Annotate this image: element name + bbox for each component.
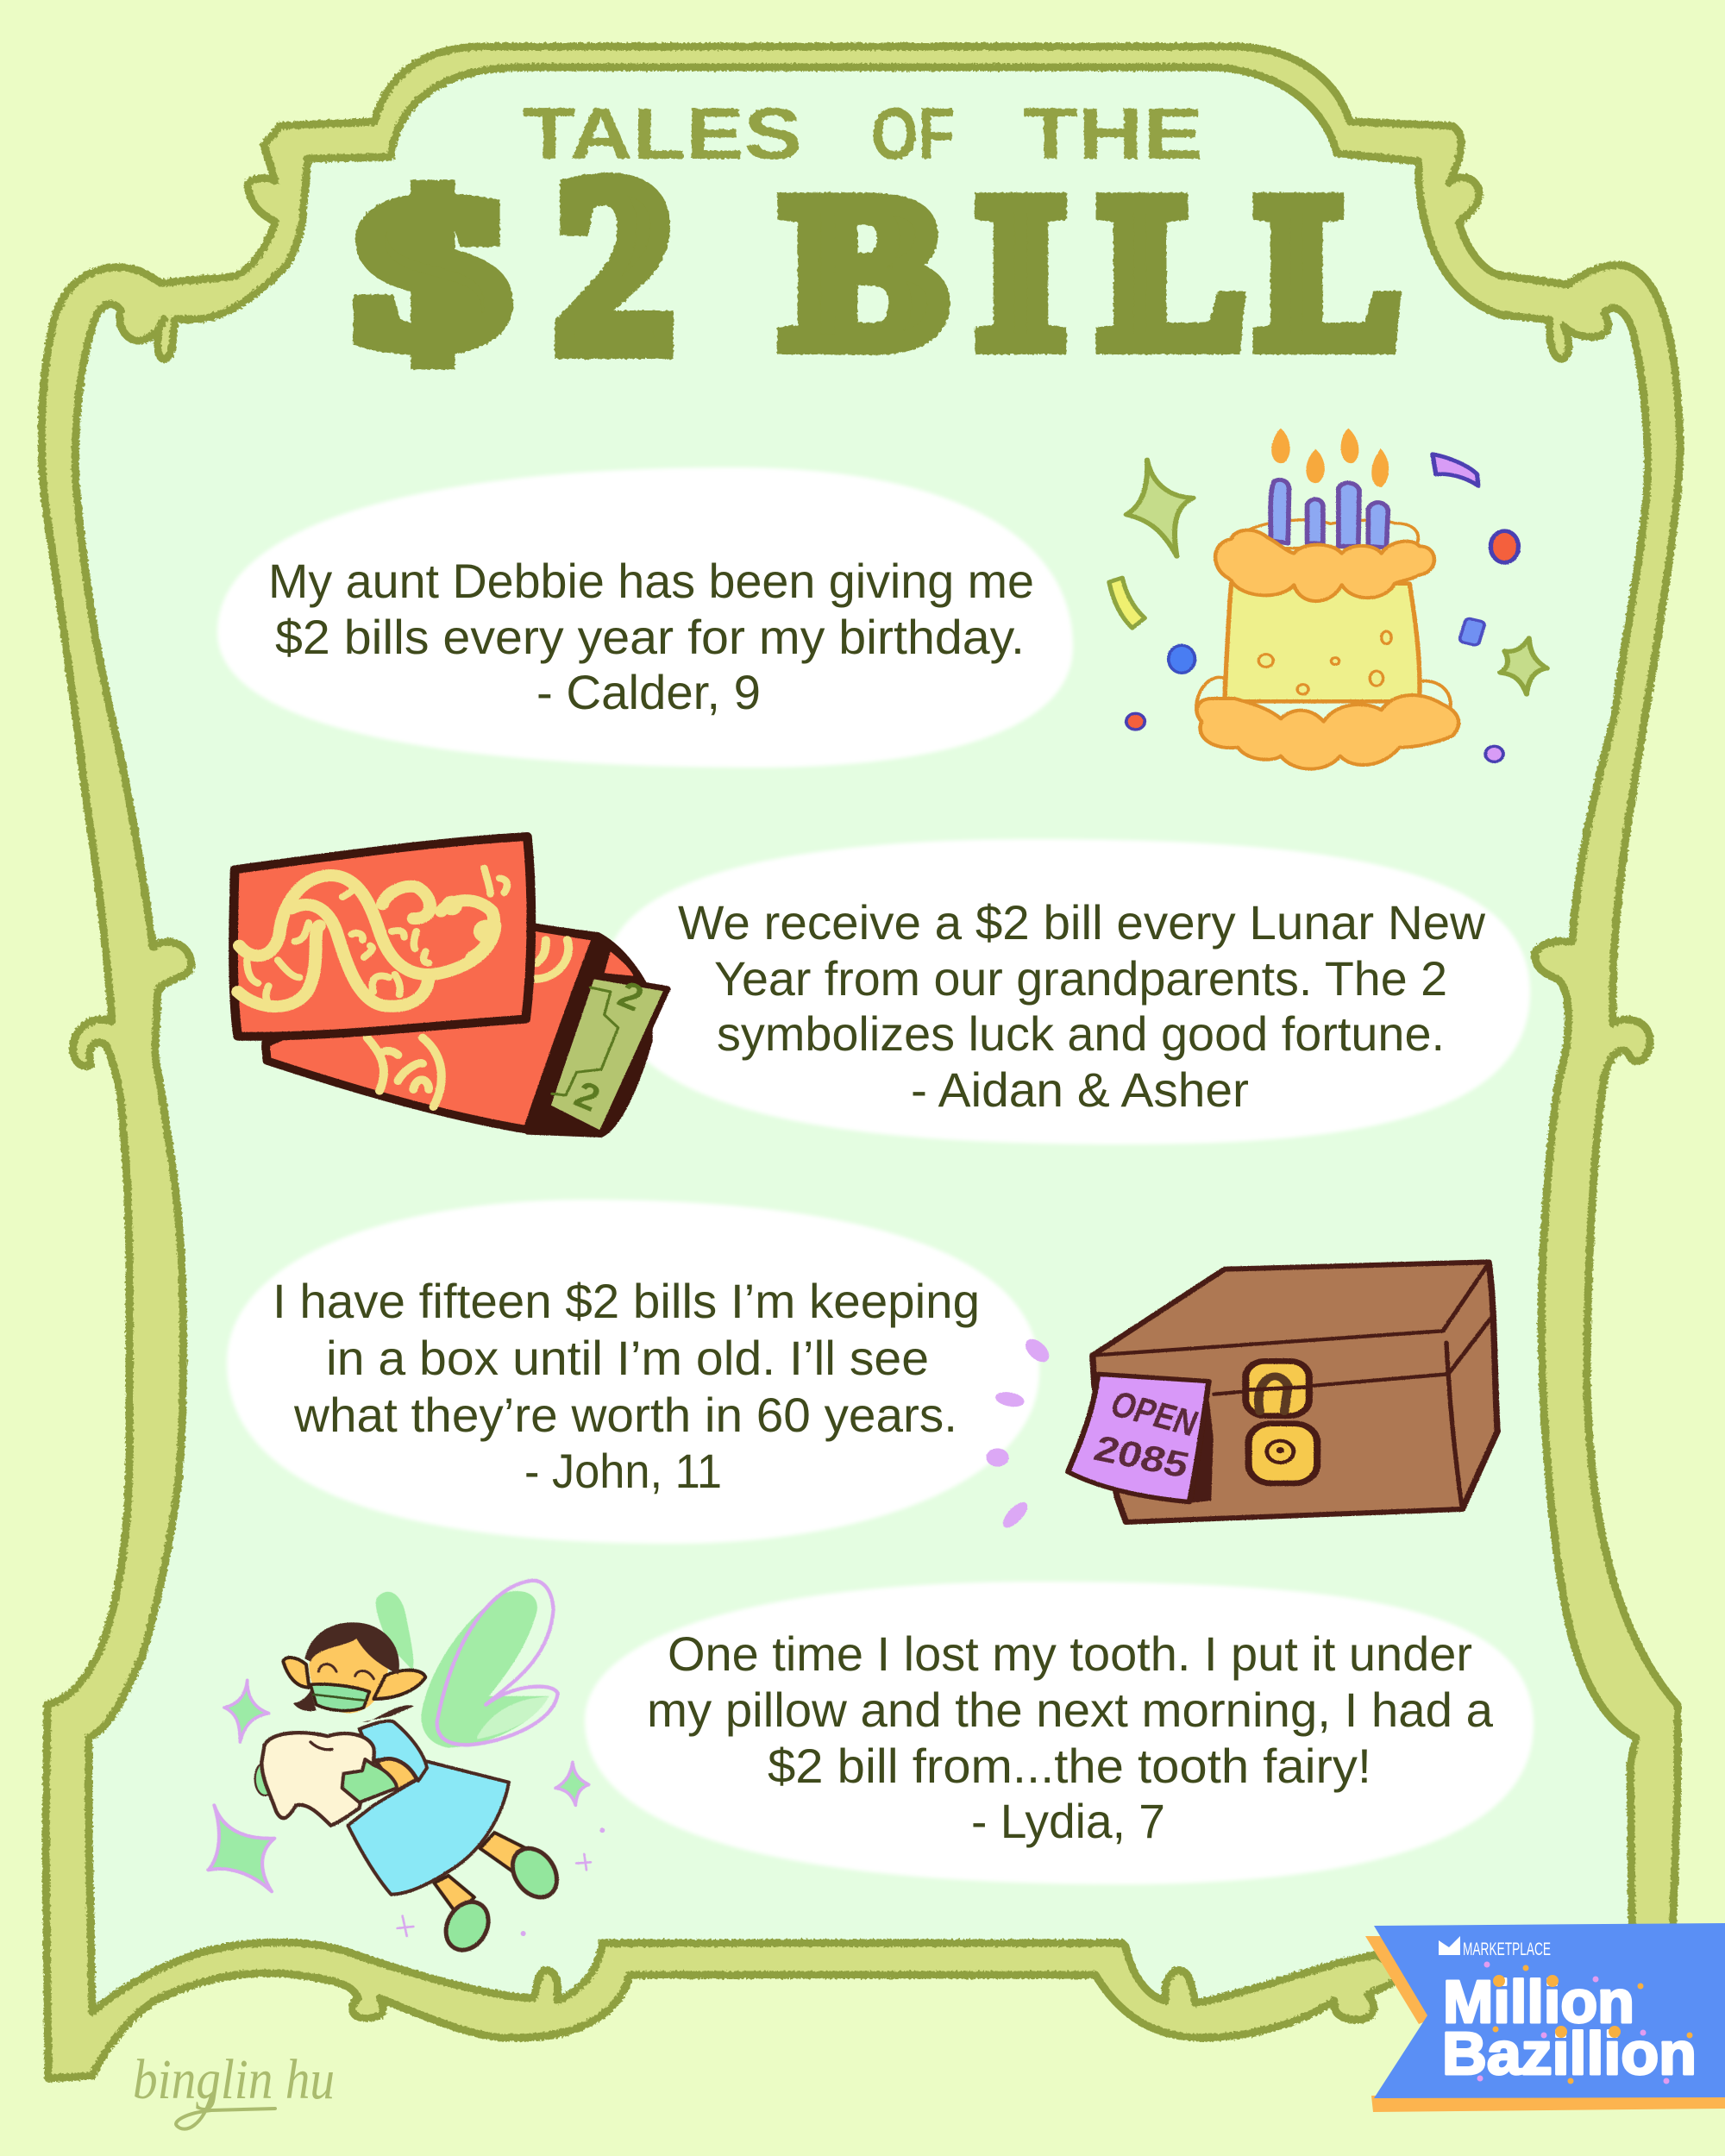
main wing	[421, 1591, 549, 1748]
bottom frosting	[1197, 695, 1458, 769]
speech bubble 3: John: in a box until I’m old. I’ll see	[326, 1331, 929, 1385]
box edges	[1093, 1263, 1492, 1509]
back hand	[255, 1762, 275, 1796]
speech bubble 4: Lydia	[585, 1582, 1534, 1884]
sparkles	[224, 1680, 269, 1742]
speech bubble 1: Calder	[217, 467, 1073, 768]
frosting back rim	[1241, 520, 1418, 549]
artist signature: binglin hu	[133, 2048, 335, 2111]
speech bubble 2: Aidan and Asher	[605, 839, 1530, 1144]
artist signature	[133, 2048, 335, 2129]
speech bubble 1: Calder: $2 bills every year for my birthday.	[275, 610, 1025, 664]
arm	[377, 1758, 417, 1791]
speech bubble 4: Lydia: - Lydia, 7	[971, 1794, 1165, 1848]
speech bubble 3: John: I have fifteen $2 bills I’m keeping	[273, 1274, 980, 1328]
marketplace logo mark	[1439, 1936, 1460, 1955]
icon: locked box labelled open 2085	[986, 1262, 1497, 1531]
title: Tales of the	[523, 93, 1203, 174]
title: Tales of the: TALES	[523, 93, 802, 174]
flag backing	[1365, 1936, 1725, 2112]
note text: OPEN	[1105, 1383, 1204, 1444]
two dollar bill	[548, 976, 668, 1134]
speech bubble 1: Calder: My aunt Debbie has been giving me	[268, 554, 1034, 608]
back envelope flap	[527, 925, 650, 1136]
title: Tales of the: OF	[871, 93, 955, 174]
back envelope ornament	[367, 940, 568, 1106]
bubble shape	[605, 839, 1530, 1144]
title: $2 Bill: B	[785, 153, 945, 392]
front hand	[342, 1759, 397, 1802]
flag body	[1374, 1923, 1725, 2098]
bubble shape	[585, 1582, 1534, 1884]
speech bubble 3: John: - John, 11	[524, 1444, 722, 1498]
bubble shape	[227, 1200, 1039, 1544]
candles	[1270, 479, 1388, 548]
tooth	[261, 1733, 374, 1826]
icon: locked box labelled open 2085: 2085	[1089, 1428, 1194, 1485]
front envelope ornament	[238, 875, 495, 1006]
speech bubble 2: Aidan and Asher: We receive a $2 bill every Lunar New	[678, 895, 1486, 950]
title: $2 Bill	[357, 126, 1399, 403]
face	[309, 1635, 388, 1714]
speech bubble 3: John: what they’re worth in 60 years.	[293, 1388, 957, 1442]
logo flag: Marketplace Million Bazillion	[1365, 1923, 1725, 2112]
bubble shape	[217, 467, 1073, 768]
back envelope	[266, 927, 597, 1130]
speech bubble 2: Aidan and Asher: - Aidan & Asher	[911, 1062, 1249, 1117]
speech bubble 4: Lydia: $2 bill from...the tooth fairy!	[768, 1739, 1371, 1793]
title: $2 Bill: 2	[555, 126, 674, 403]
title: $2 Bill: $	[357, 155, 507, 389]
cake body	[1225, 584, 1420, 701]
speech bubble 2: Aidan and Asher: Year from our grandparents. The 2	[714, 951, 1447, 1006]
eyes	[318, 1664, 373, 1679]
icon: red envelopes with $2 bill	[234, 837, 668, 1136]
ears	[283, 1658, 309, 1688]
cake base rims	[1196, 677, 1451, 713]
skirt	[348, 1761, 509, 1895]
latch	[1245, 1361, 1309, 1416]
icon: birthday cake with confetti	[1109, 429, 1547, 769]
title: $2 Bill: L	[1259, 153, 1399, 392]
sticky note	[1068, 1374, 1208, 1502]
padlock	[1249, 1424, 1317, 1483]
front envelope	[234, 837, 531, 1037]
legs	[480, 1833, 532, 1873]
candle flames	[1271, 429, 1389, 487]
speech bubble 3: John	[227, 1200, 1039, 1544]
cake holes	[1258, 631, 1391, 694]
sticky note shadow	[1186, 1382, 1214, 1503]
speech bubble 4: Lydia: my pillow and the next morning, I had a	[647, 1683, 1494, 1737]
icon: red envelopes with $2 bill: 2	[568, 1073, 607, 1119]
speech bubble 2: Aidan and Asher: symbolizes luck and good fortune.	[717, 1006, 1445, 1061]
flag dots	[1492, 1965, 1692, 2084]
speech bubble 1: Calder: - Calder, 9	[536, 665, 761, 719]
back wing	[376, 1592, 413, 1670]
title: $2 Bill: I	[978, 153, 1063, 392]
marketplace wordmark: MARKETPLACE	[1463, 1940, 1551, 1959]
box body	[1093, 1262, 1497, 1522]
hair	[304, 1622, 399, 1675]
top frosting	[1215, 530, 1434, 601]
sleeve	[360, 1721, 427, 1781]
shoes	[504, 1840, 566, 1906]
icon: tooth fairy carrying a tooth	[209, 1581, 605, 1958]
confetti	[1126, 460, 1194, 556]
title: $2 Bill: L	[1102, 153, 1244, 392]
million wordmark: Million	[1443, 1968, 1634, 2035]
icon: red envelopes with $2 bill: 2	[612, 972, 650, 1019]
title: Tales of the: THE	[1023, 93, 1203, 174]
mask	[310, 1684, 369, 1711]
bazillion wordmark: Bazillion	[1442, 2020, 1697, 2087]
speech bubble 4: Lydia: One time I lost my tooth. I put it under	[668, 1626, 1472, 1681]
shine marks	[986, 1336, 1054, 1531]
